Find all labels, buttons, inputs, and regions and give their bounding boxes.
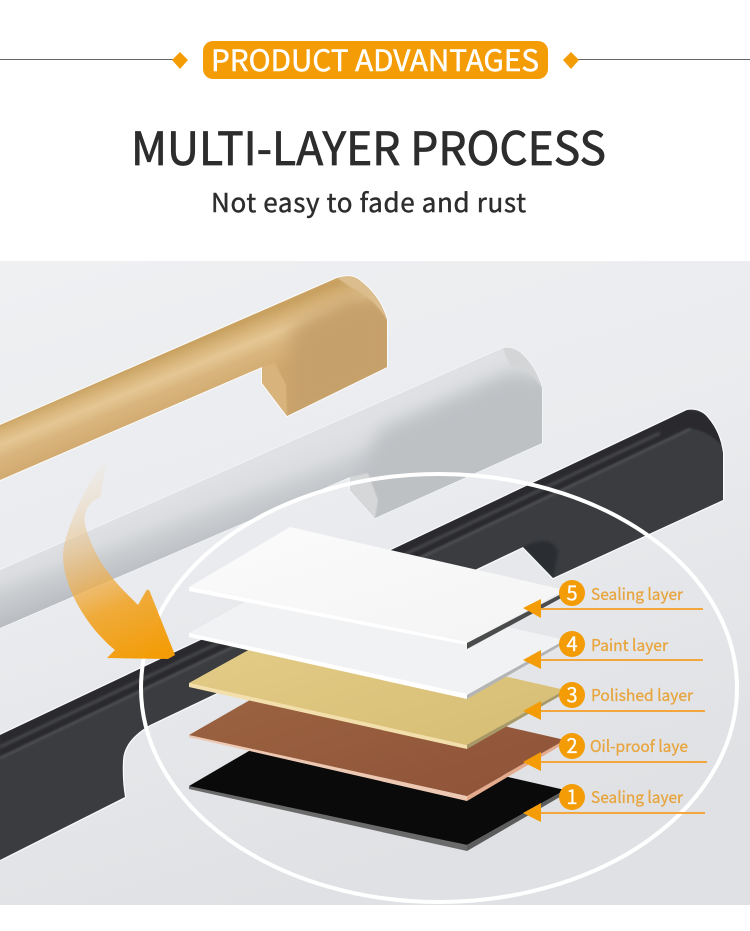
callout 1: sealing layer: 1 xyxy=(566,781,578,810)
callout 3: polished layer: 3 xyxy=(566,679,578,708)
callout 2: oil-proof layer xyxy=(523,730,707,771)
silver handle xyxy=(0,340,560,630)
subtitle: Not easy to fade and rust xyxy=(211,183,526,220)
callout 3: polished layer: Polished layer xyxy=(591,682,694,706)
curved orange arrow xyxy=(63,460,175,659)
callout 4: paint layer: 4 xyxy=(566,628,578,657)
callout 2: oil-proof layer: Oil-proof laye xyxy=(590,733,688,757)
layer sheet 3: gold xyxy=(189,627,565,749)
header banner xyxy=(0,38,750,80)
header banner: PRODUCT ADVANTAGES xyxy=(211,38,539,80)
black handle xyxy=(0,400,730,865)
layer sheet 2: copper xyxy=(189,677,565,801)
callout 3: polished layer xyxy=(523,679,705,720)
callout 4: paint layer xyxy=(523,628,703,669)
layer sheet 1: black xyxy=(189,727,565,851)
callout 5: sealing layer: Sealing layer xyxy=(591,581,684,605)
callout 1: sealing layer: Sealing layer xyxy=(591,784,684,808)
layer sheet 4: white paint xyxy=(189,577,565,699)
product photo panel xyxy=(0,261,750,905)
callout 2: oil-proof layer: 2 xyxy=(566,730,578,759)
callout 5: sealing layer xyxy=(523,577,703,618)
gold handle xyxy=(0,276,388,481)
callout 4: paint layer: Paint layer xyxy=(591,632,669,656)
callout 5: sealing layer: 5 xyxy=(566,577,578,606)
title: MULTI-LAYER PROCESS xyxy=(131,113,606,179)
white ellipse callout xyxy=(141,474,737,902)
callout 1: sealing layer xyxy=(523,781,705,822)
layer sheet 5: white sealing xyxy=(189,527,565,649)
